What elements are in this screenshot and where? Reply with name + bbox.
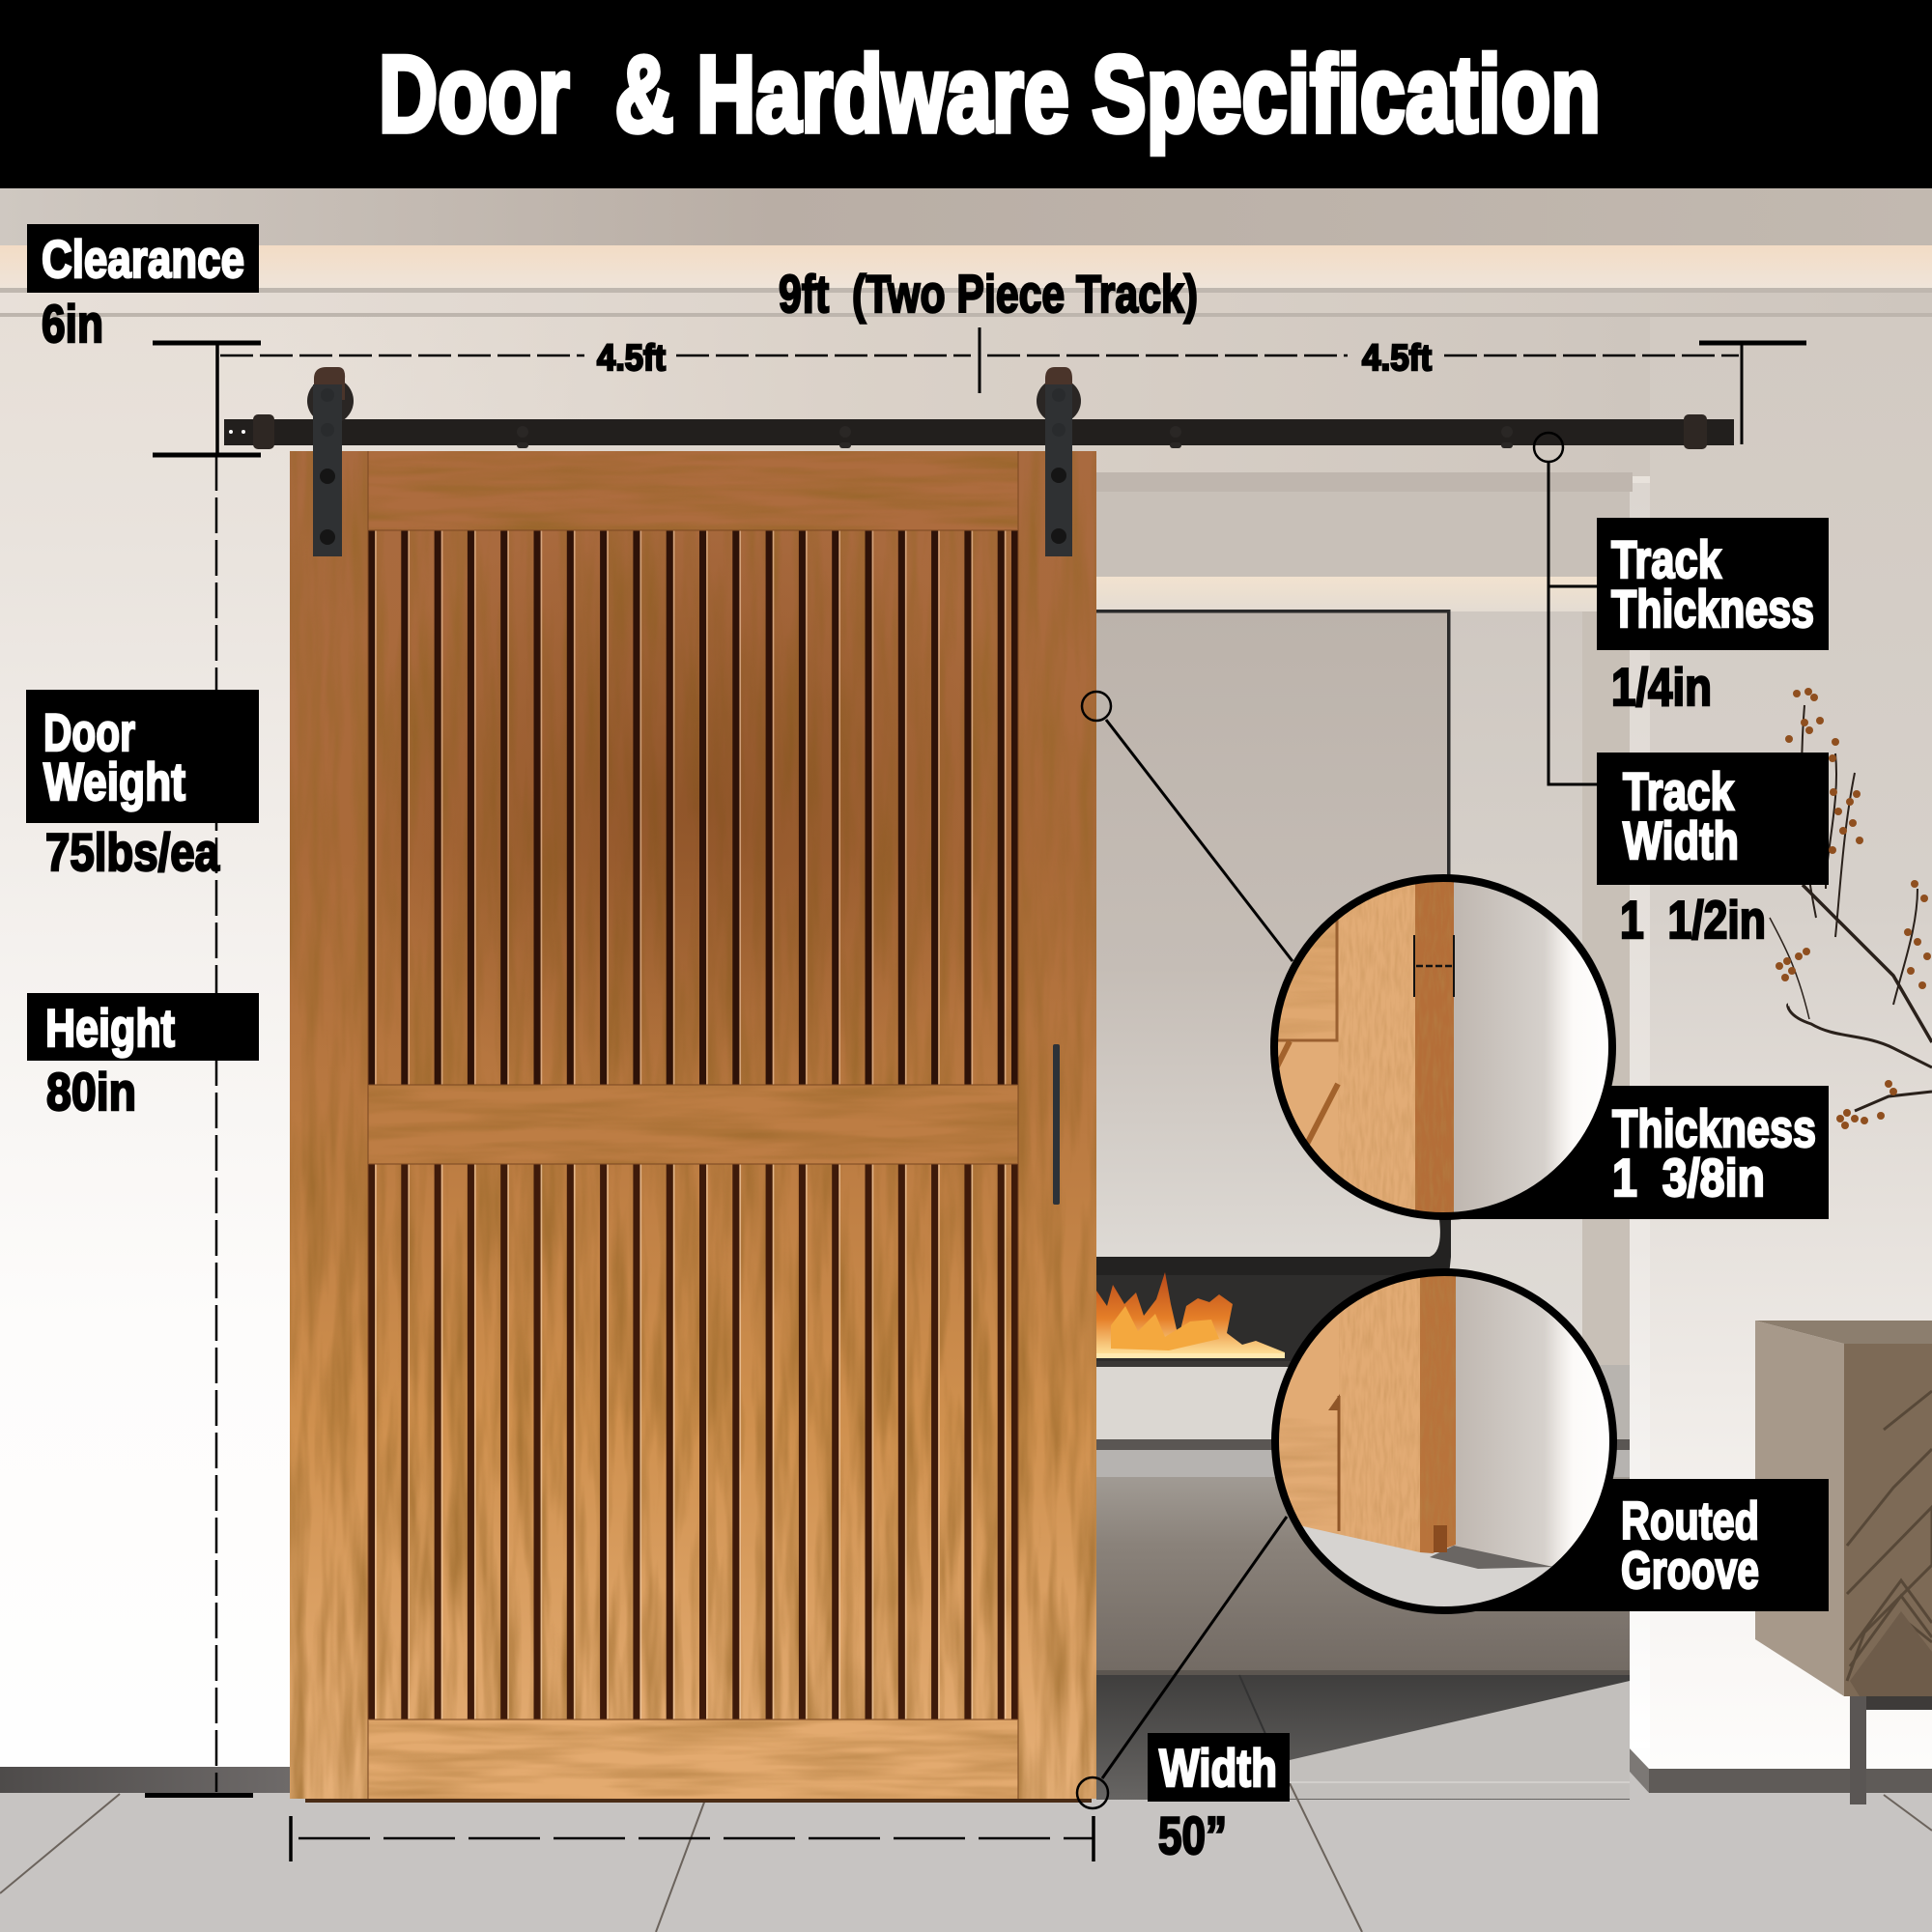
label: clearance: 6in	[42, 294, 103, 354]
label: width	[1148, 1733, 1290, 1865]
barn door track	[224, 414, 1734, 449]
baseboards and floor	[0, 1675, 1932, 1932]
label: track width: Track	[1623, 761, 1734, 821]
label: track thickness: Track	[1611, 529, 1721, 589]
label: routed groove box	[1444, 1479, 1829, 1611]
upper slat panel	[368, 530, 1018, 1085]
label: clearance: Clearance	[42, 229, 244, 289]
leader: track callouts	[1534, 433, 1599, 784]
detail circle: routed groove	[1265, 1265, 1633, 1623]
dimension: height line	[145, 455, 253, 1795]
label: track width: Width	[1623, 810, 1739, 870]
dimension: width line	[291, 1816, 1094, 1861]
right hanger	[1037, 367, 1081, 556]
title bar	[0, 0, 1932, 188]
track spacers	[517, 426, 1513, 448]
leader: door edge callout	[1082, 692, 1293, 961]
label: track thickness: Thickness	[1611, 579, 1814, 639]
label: thickness box: Thickness	[1612, 1098, 1816, 1158]
door rails	[368, 451, 1018, 1799]
label: track thickness: 1/4in	[1611, 657, 1712, 717]
track stops	[253, 414, 1707, 449]
label: width: Width	[1159, 1738, 1277, 1798]
label: height: Height	[45, 998, 175, 1058]
label: track width	[1597, 753, 1829, 950]
left hanger	[307, 367, 354, 556]
decorative branches with berries	[1770, 688, 1932, 1129]
label: height: 80in	[46, 1062, 136, 1122]
label: door weight	[26, 690, 259, 882]
label: routed groove box: Groove	[1621, 1540, 1759, 1600]
label: thickness box	[1443, 1086, 1829, 1219]
label: width: 50”	[1158, 1805, 1227, 1865]
label: track length: 4.5ft	[1362, 338, 1432, 379]
fireplace flames	[1096, 1272, 1285, 1358]
label: height	[27, 993, 259, 1122]
label: track length: 9ft (Two Piece Track)	[779, 264, 1198, 324]
detail circle: door thickness	[1265, 869, 1623, 1227]
door handle	[1053, 1044, 1060, 1205]
label: thickness box: 1 3/8in	[1612, 1148, 1765, 1208]
dimension: track length	[153, 327, 1806, 455]
label: track thickness	[1597, 518, 1829, 717]
label: track length	[597, 264, 1432, 379]
label: door weight: Weight	[43, 752, 185, 811]
door	[290, 451, 1096, 1803]
leader: width callout	[1077, 1517, 1287, 1808]
thickness dimension mark	[1414, 935, 1454, 997]
cabinet	[1755, 1321, 1932, 1804]
lower slat panel	[371, 1164, 1014, 1719]
label: clearance	[27, 224, 259, 354]
label: door weight: Door	[43, 702, 135, 762]
label: door weight: 75lbs/ea	[45, 822, 219, 882]
label: track length: 4.5ft	[597, 338, 666, 379]
label: routed groove box: Routed	[1621, 1491, 1759, 1550]
label: track width: 1 1/2in	[1620, 890, 1766, 950]
